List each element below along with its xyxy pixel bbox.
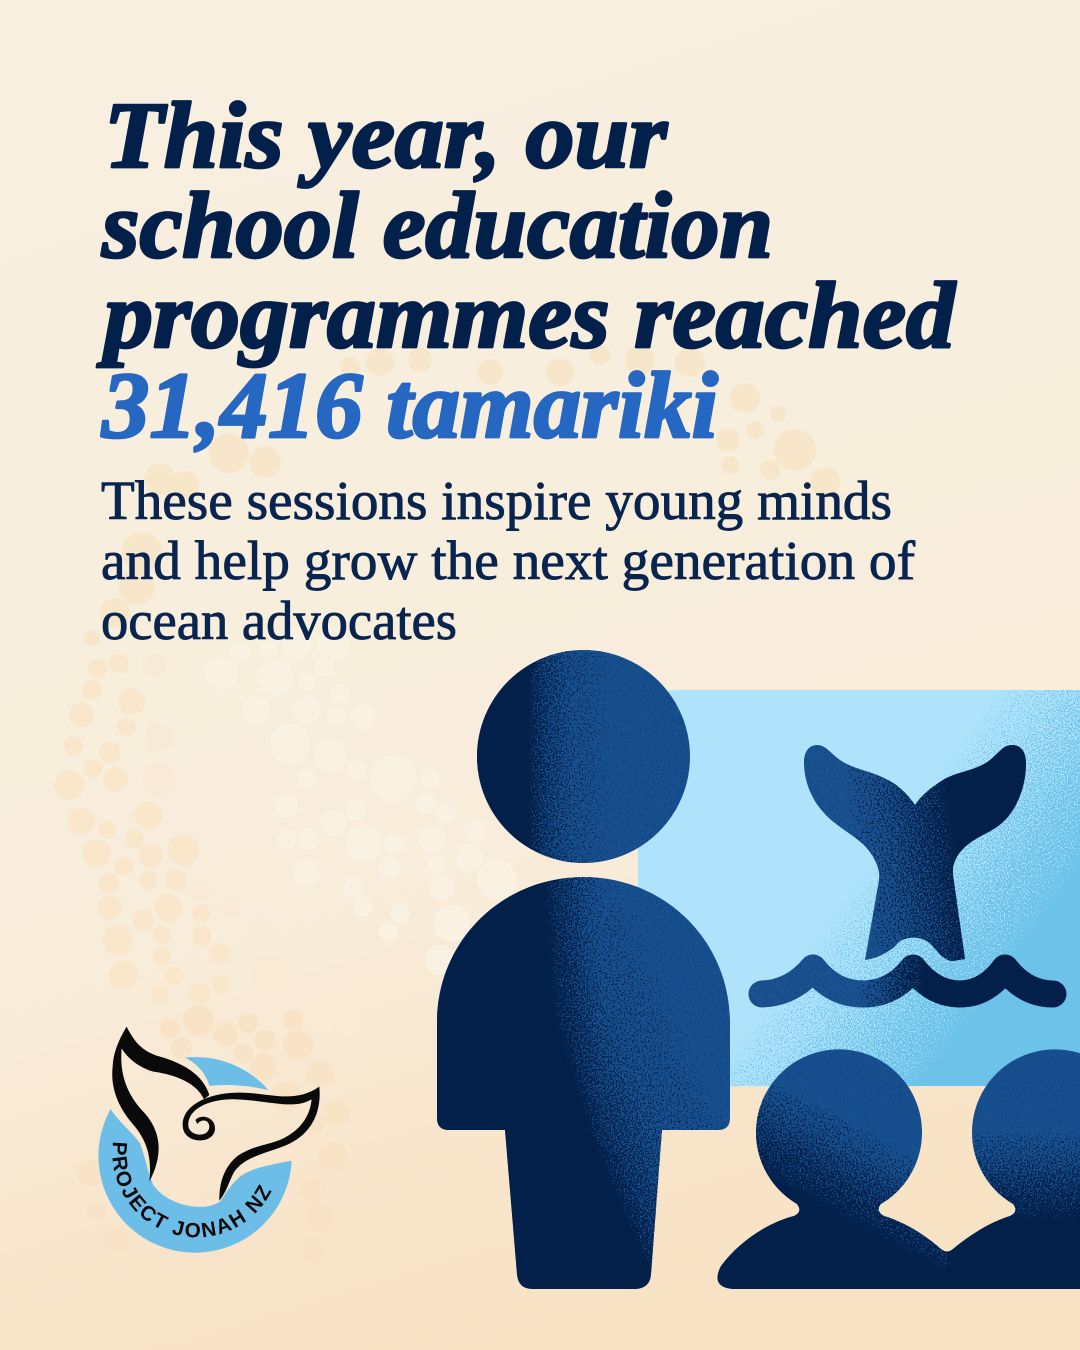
logo whale tail outline <box>112 1027 320 1201</box>
icon: whale tail on screen <box>804 745 1026 961</box>
logo wordmark: PROJECT JONAH NZ <box>112 1142 272 1238</box>
logo: Project Jonah NZ <box>98 1026 320 1253</box>
subtitle text: These sessions inspire young minds <box>101 470 892 531</box>
background dot pattern: around logo <box>77 1005 350 1263</box>
subtitle text <box>101 470 916 651</box>
panel: presentation screen <box>630 680 1080 1100</box>
title highlight: 31,416 tamariki: 31,416 tamariki <box>101 354 718 458</box>
title <box>97 84 957 458</box>
subtitle text: and help grow the next generation of <box>101 530 916 591</box>
title: This year, our <box>104 84 668 188</box>
icon: waves on screen <box>748 954 1066 1008</box>
subtitle text: ocean advocates <box>101 590 457 651</box>
title: programmes reached <box>97 264 957 368</box>
background dot pattern: left spiral <box>54 627 517 1047</box>
icon: teacher body <box>430 870 740 1295</box>
background dot pattern: top around title <box>84 345 840 646</box>
icon: two students <box>710 1040 1080 1295</box>
title: school education <box>101 174 773 278</box>
icon: teacher head <box>477 650 690 863</box>
logo blue ring <box>98 1057 292 1253</box>
